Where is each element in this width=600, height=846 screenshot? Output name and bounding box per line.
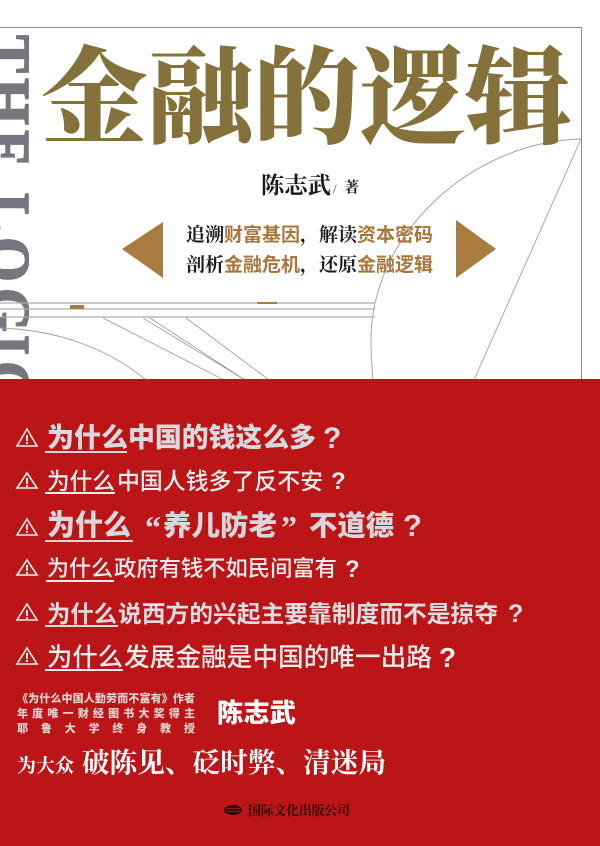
decorative line art <box>0 139 581 380</box>
tan accent marks <box>70 302 277 309</box>
tagline: 金融危机 <box>224 253 300 276</box>
cover frame <box>0 28 582 380</box>
question 5 <box>17 600 523 628</box>
publisher: 国际文化出版公司 <box>248 803 350 818</box>
question 4 <box>17 556 360 583</box>
question 1 <box>17 422 341 455</box>
vertical english title <box>0 35 29 379</box>
main title: 金融的逻辑 <box>41 41 572 158</box>
question 2: 为什么 <box>47 468 115 494</box>
tagline: 资本密码 <box>357 223 433 246</box>
tagline <box>186 223 433 276</box>
question 3: “ <box>145 509 161 545</box>
slogan: 为大众 <box>17 755 74 777</box>
question 2: ? <box>331 468 346 495</box>
question 1: 为什么 <box>47 423 128 453</box>
question 4: 为什么 <box>47 556 113 581</box>
question 3: 不道德 <box>309 509 394 541</box>
question 1: ? <box>323 422 341 455</box>
question 6: ? <box>439 642 456 673</box>
author: 陈志武 <box>261 173 331 198</box>
question 5: ? <box>508 600 523 628</box>
question 3: 为什么 <box>47 509 131 542</box>
question 3: 养儿防老 <box>163 509 277 541</box>
author credentials <box>17 691 195 735</box>
tagline: 剖析 <box>186 253 224 276</box>
tagline: ，解读 <box>300 224 358 246</box>
slogan: 破陈见、砭时弊、清迷局 <box>82 747 386 778</box>
tagline: 财富基因 <box>224 223 300 246</box>
author credentials: 《为什么中国人勤劳而不富有》作者 <box>17 691 195 705</box>
question 2: 中国人钱多了反不安 <box>117 468 323 494</box>
author: 著 <box>344 178 359 196</box>
question 2 <box>17 468 346 495</box>
right arrow <box>456 220 496 278</box>
question 6 <box>17 642 456 673</box>
author: / <box>333 181 337 196</box>
question 3 <box>17 508 422 545</box>
question 1: 中国的钱这么多 <box>128 422 316 453</box>
question 5: 说西方的兴起主要靠制度而不是掠夺 <box>118 600 498 627</box>
left arrow <box>122 222 163 278</box>
tagline: 金融逻辑 <box>357 253 433 276</box>
question 6: 为什么 <box>47 644 123 672</box>
question 5: 为什么 <box>47 601 117 627</box>
question 3: ” <box>281 509 297 545</box>
tagline: 追溯 <box>186 224 224 246</box>
question 4: ? <box>345 556 360 583</box>
red band <box>0 379 600 846</box>
tagline: ，还原 <box>300 254 358 276</box>
author credentials: 年度唯一财经图书大奖得主 <box>17 706 195 720</box>
question 3: ? <box>403 508 422 543</box>
question 4: 政府有钱不如民间富有 <box>114 556 337 581</box>
author credentials: 耶鲁大学终身教授 <box>17 721 195 735</box>
question 6: 发展金融是中国的唯一出路 <box>124 644 432 672</box>
author name on band: 陈志武 <box>217 698 296 728</box>
